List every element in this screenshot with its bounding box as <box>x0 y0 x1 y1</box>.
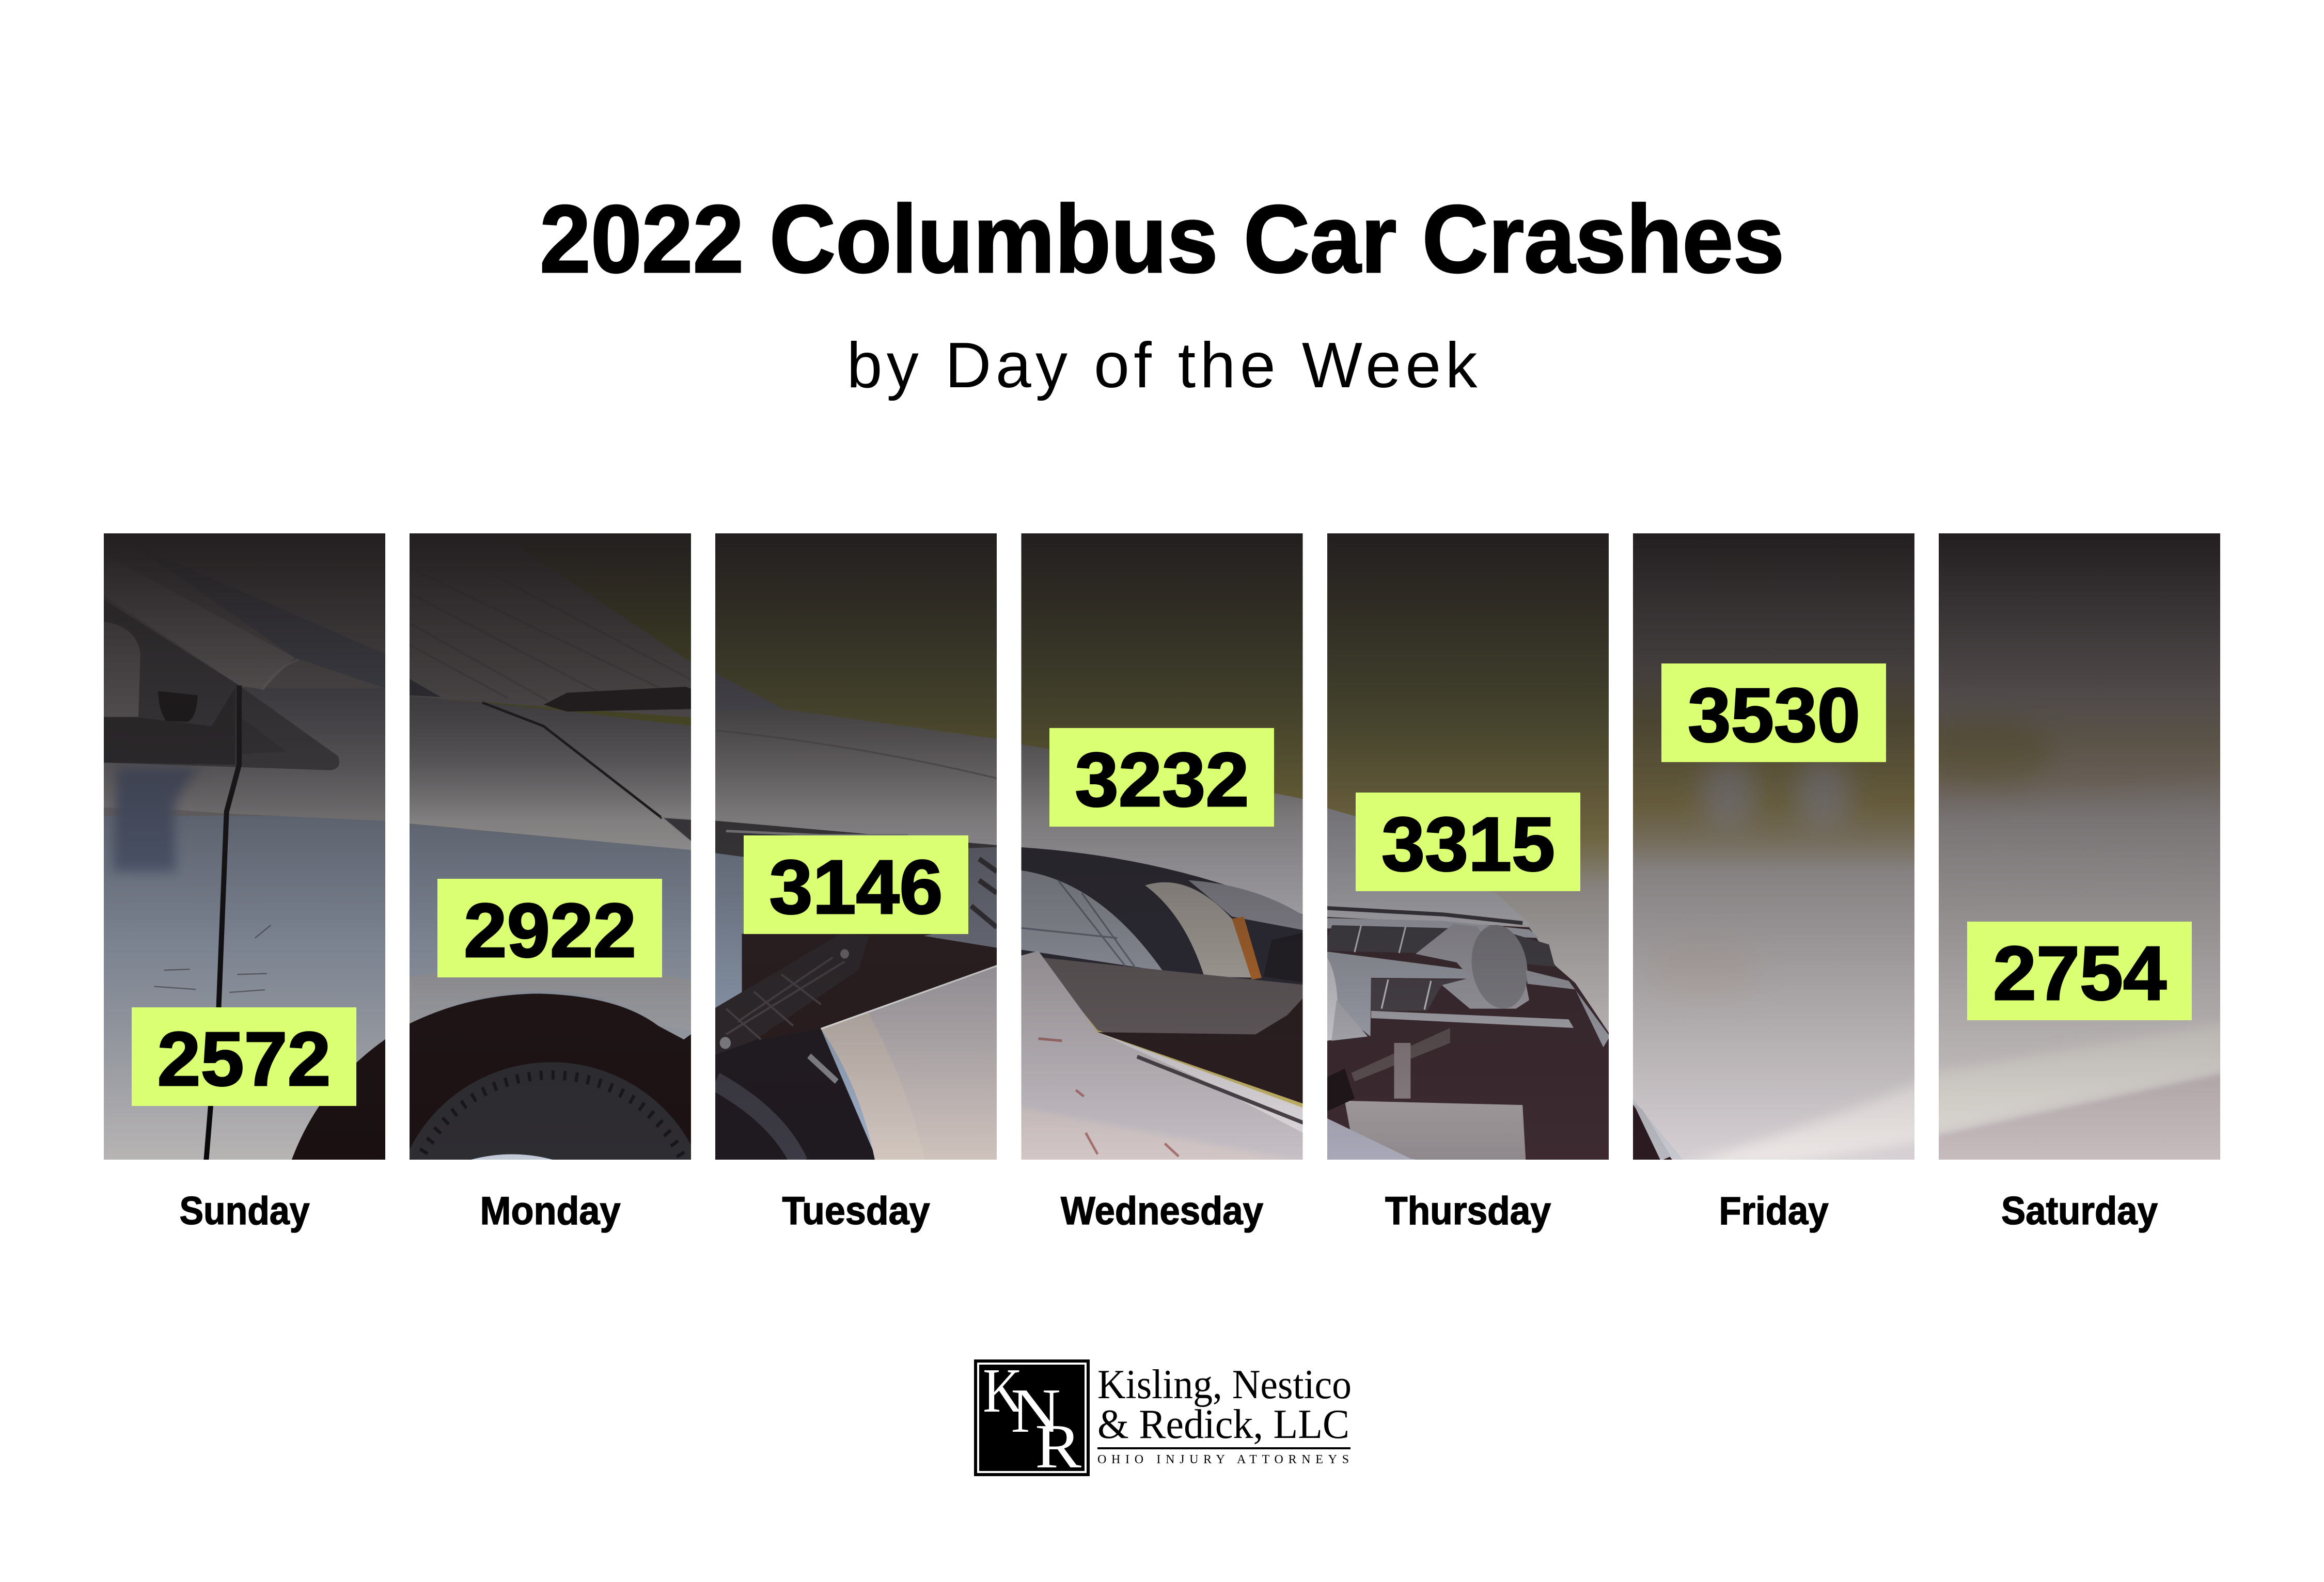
logo: Kisling, Nestico & Redick, LLC <box>974 1356 1352 1481</box>
icon: KNR monogram: R <box>1035 1412 1082 1481</box>
panel: Saturday <box>1939 533 2220 1233</box>
photo strip: headlight and damaged body <box>1022 533 1302 1160</box>
photo strip: blurred road background <box>1633 533 1914 1160</box>
value tag: 3530 <box>1661 663 1886 762</box>
icon: KNR monogram: N <box>1011 1376 1061 1446</box>
icon: KNR monogram <box>974 1356 1090 1481</box>
value tag: 3530: 3530 <box>1688 673 1860 758</box>
day label: Wednesday: Wednesday <box>1061 1189 1263 1233</box>
panel: Monday <box>410 533 691 1233</box>
value tag: 3232 <box>1049 728 1274 827</box>
value tag: 2572: 2572 <box>157 1017 331 1102</box>
value tag: 2922: 2922 <box>464 888 636 973</box>
subtitle: by Day of the Week <box>847 330 1478 401</box>
panel: Sunday <box>104 533 385 1233</box>
value tag: 2572 <box>132 1007 356 1106</box>
day label: Monday: Monday <box>480 1189 621 1233</box>
day label: Saturday: Saturday <box>2001 1189 2158 1233</box>
value tag: 3146 <box>744 835 968 934</box>
value tag: 3315: 3315 <box>1381 802 1555 887</box>
panel: Tuesday <box>710 516 1011 1233</box>
photo strip: blurred hood highlight <box>1914 516 2227 1201</box>
photo strip: car door and mirror <box>104 533 385 1160</box>
value tag: 2754: 2754 <box>1993 931 2166 1016</box>
day label: Tuesday: Tuesday <box>782 1189 930 1233</box>
value tag: 3315 <box>1356 793 1580 891</box>
firm name line 2: & Redick, LLC <box>1097 1402 1349 1447</box>
firm name: Kisling, Nestico <box>1097 1362 1352 1407</box>
photo strip: windshield, fender and tire <box>410 533 691 1160</box>
day label: Sunday: Sunday <box>180 1189 310 1233</box>
value tag: 2754 <box>1967 922 2192 1020</box>
panel: Wednesday <box>1015 516 1315 1233</box>
icon: KNR monogram: K <box>983 1356 1023 1426</box>
tagline: OHIO INJURY ATTORNEYS <box>1097 1453 1349 1466</box>
day label: Thursday: Thursday <box>1385 1189 1551 1233</box>
day label: Friday: Friday <box>1719 1189 1828 1233</box>
photo strip: hood, bracket and fender <box>715 533 997 1160</box>
title: 2022 Columbus Car Crashes <box>540 186 1784 293</box>
panel: Thursday <box>1322 516 1615 1233</box>
value tag: 3146: 3146 <box>770 845 943 930</box>
value tag: 2922 <box>437 879 662 977</box>
photo strip: grille and exposed engine <box>1327 533 1609 1160</box>
value tag: 3232: 3232 <box>1075 737 1249 822</box>
panel: Friday <box>1626 516 1922 1233</box>
